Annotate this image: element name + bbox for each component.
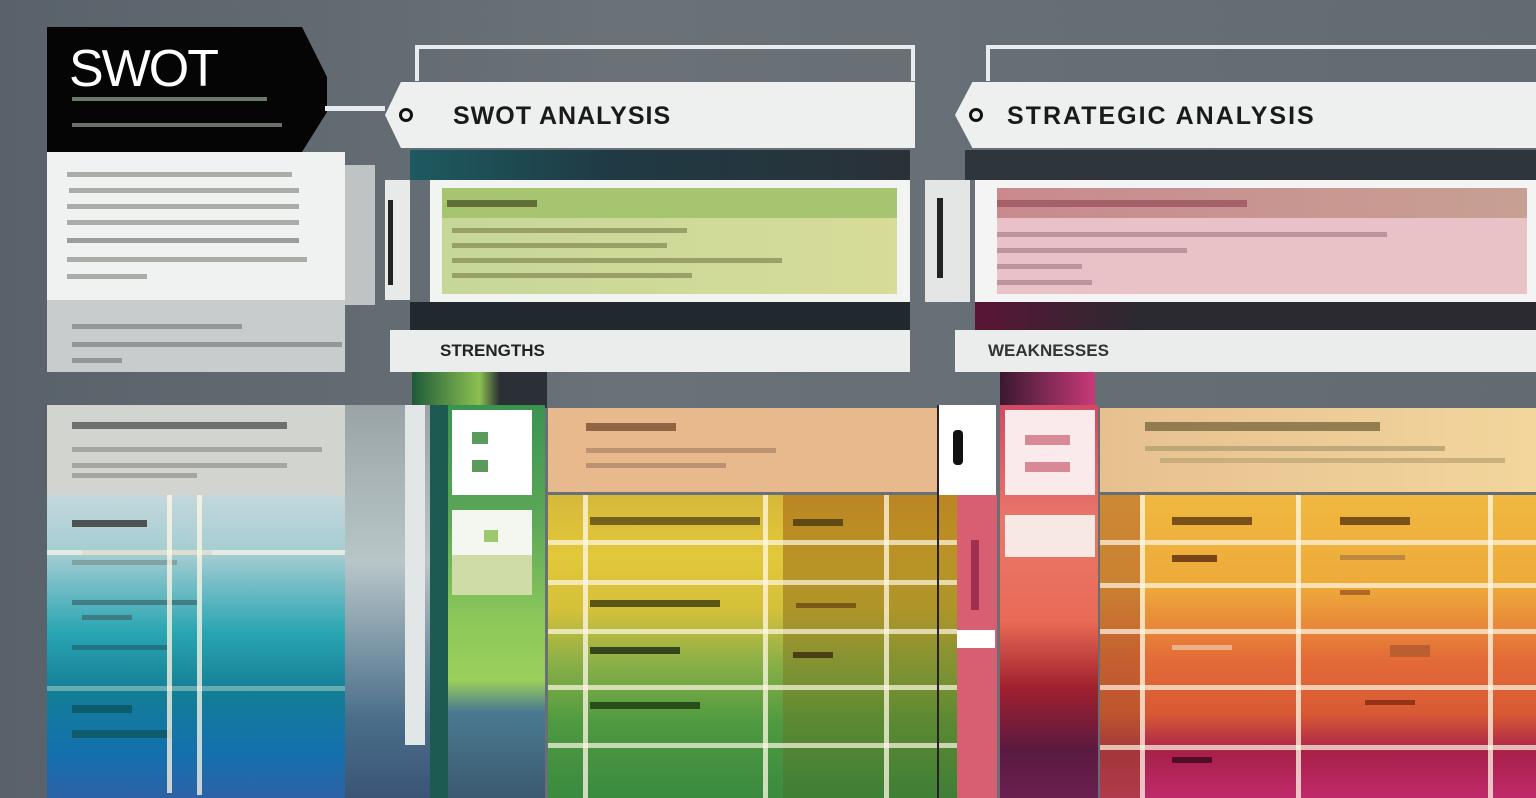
icon box dark glyph	[938, 405, 996, 495]
panel: opportunities notes gray	[47, 405, 345, 495]
top frame lines	[415, 45, 915, 81]
header: strategic analysis	[955, 82, 1536, 148]
column: pink strip	[957, 495, 997, 798]
panel: strengths header peach	[548, 408, 938, 492]
title text: SWOT	[69, 40, 217, 98]
bar: weaknesses: WEAKNESSES	[988, 341, 1109, 360]
icon box	[452, 410, 532, 495]
note panel	[47, 300, 345, 372]
panel: weaknesses summary pink	[975, 180, 1536, 302]
panel: strengths summary green	[430, 180, 910, 302]
header: swot analysis	[385, 82, 915, 148]
intro text panel	[47, 152, 345, 300]
column: red-pink	[1000, 405, 1098, 798]
grid: strengths	[548, 495, 960, 798]
header: swot analysis: SWOT ANALYSIS	[453, 102, 671, 130]
grid: weaknesses	[1100, 495, 1536, 798]
panel: weaknesses header light orange	[1100, 408, 1536, 492]
icon: pin	[969, 108, 983, 122]
label box	[1005, 410, 1095, 495]
title tab	[47, 27, 327, 152]
column: green	[430, 405, 545, 798]
panel: blue column	[47, 495, 345, 798]
bar: strengths: STRENGTHS	[440, 341, 545, 360]
bar: strengths	[390, 330, 910, 372]
bar: weaknesses	[955, 330, 1536, 372]
header: strategic analysis: STRATEGIC ANALYSIS	[1007, 102, 1316, 130]
icon: pin	[399, 108, 413, 122]
